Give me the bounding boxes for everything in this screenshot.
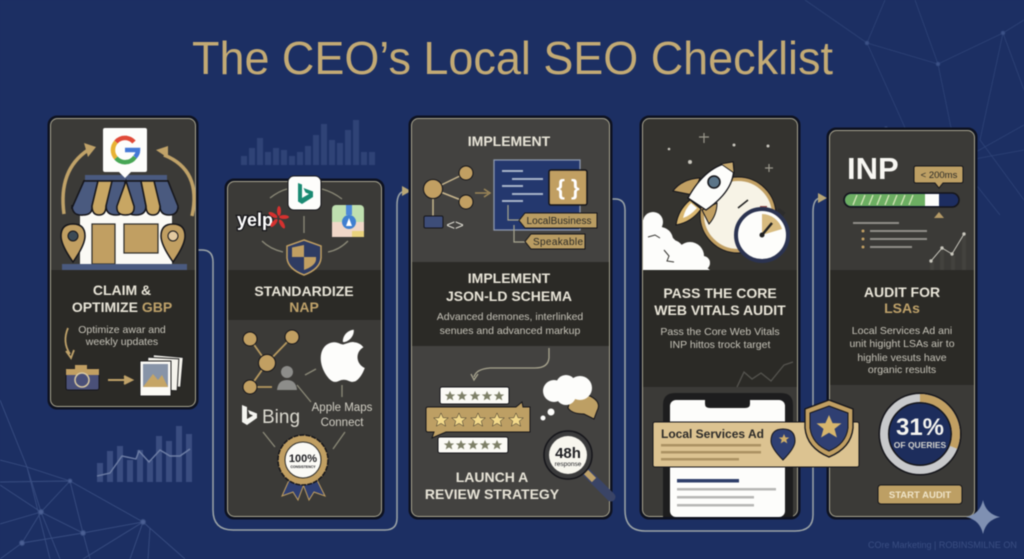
text block: Advanced demones, interlinked <box>437 311 583 323</box>
text block: highlie vesuts have <box>857 352 947 364</box>
icon: code document <box>494 160 587 242</box>
icon: Apple Maps <box>332 205 364 237</box>
panel band <box>412 262 609 346</box>
panel band <box>643 270 797 387</box>
icon: magnifier 48h: 48h <box>555 445 581 462</box>
heading <box>864 284 940 316</box>
icon: Bing logo with label <box>242 405 300 428</box>
icon: shield <box>287 240 321 275</box>
heading: PASS THE CORE <box>663 285 777 301</box>
donut chart: 31% of queries: 31% <box>896 414 944 441</box>
heading: WEB VITALS AUDIT <box>654 302 786 318</box>
heading: IMPLEMENT <box>468 270 551 286</box>
icon: large clock <box>700 177 776 253</box>
text block <box>437 311 583 337</box>
text block: weekly updates <box>85 336 158 348</box>
icon: Bing logo with label: Bing <box>262 407 300 428</box>
donut chart: 31% of queries: OF QUERIES <box>894 440 947 450</box>
heading: LAUNCH A <box>456 469 528 485</box>
text block: Optimize awar and <box>78 324 166 336</box>
decorative network bottom left <box>0 400 185 559</box>
label: Apple Maps Connect: Connect <box>321 417 364 429</box>
icon: Bing tile <box>288 176 321 210</box>
icon: thought cloud <box>540 375 598 420</box>
ad card <box>653 400 859 467</box>
review card bottom <box>438 437 508 453</box>
panel band <box>51 270 195 406</box>
tag: Speakable: Speakable <box>533 237 583 248</box>
heading <box>446 270 572 304</box>
arrow: curved down <box>471 348 549 380</box>
icon: magnifier 48h: response <box>555 461 582 468</box>
connector: panel 1 to panel 2 and 3 <box>197 186 411 530</box>
icon: magnifier 48h <box>544 431 611 497</box>
icon: storefront <box>62 175 187 270</box>
badge: 100% consistency: CONSISTENCY <box>290 465 316 469</box>
decorative bar chart top <box>241 120 375 165</box>
panel: core web vitals <box>641 117 859 518</box>
connector: panel 3 to panel 4 and 5 <box>611 193 827 531</box>
heading <box>654 285 786 318</box>
heading <box>425 469 560 502</box>
label: Apple Maps Connect: Apple Maps <box>312 402 373 414</box>
arrow: camera to photos <box>108 376 132 384</box>
dashed ring <box>262 189 348 252</box>
arrow: right curved <box>156 146 194 216</box>
tag: LocalBusiness: LocalBusiness <box>526 216 592 227</box>
icon: right map pin <box>161 224 185 262</box>
heading: INP: INP <box>847 151 899 186</box>
icon: stopwatch <box>736 200 788 261</box>
panel: standardize NAP <box>226 176 383 518</box>
heading: AUDIT FOR <box>864 284 940 300</box>
icon: rocket <box>673 162 734 225</box>
phone <box>663 393 793 517</box>
panel band <box>228 270 381 320</box>
icon: large shield <box>805 400 853 457</box>
text block <box>660 326 780 351</box>
icon: sparkle <box>966 500 1000 534</box>
heading: OPTIMIZE GBP <box>72 299 172 315</box>
panel: claim and optimize GBP <box>49 117 197 408</box>
lower section <box>643 387 797 516</box>
badge: 100% consistency <box>278 435 328 500</box>
tag: Speakable <box>525 234 585 249</box>
panel: JSON-LD schema and reviews <box>410 117 611 518</box>
text block: INP hittos trock target <box>670 339 770 351</box>
heading: REVIEW STRATEGY <box>425 486 560 502</box>
list lines <box>853 222 927 248</box>
decorative bar chart bottom <box>97 426 192 482</box>
text block: Pass the Core Web Vitals <box>660 326 780 338</box>
heading: LSAs <box>884 300 920 316</box>
progress bar <box>844 193 959 218</box>
icon: small pin <box>771 429 795 460</box>
heading: CLAIM & <box>93 282 151 298</box>
review card featured <box>426 402 530 438</box>
text block: organic results <box>868 364 936 376</box>
footer credit: COre Marketing | ROBINSMILNE ON <box>868 540 1017 550</box>
tag: under 200ms: < 200ms <box>921 170 958 181</box>
icon: Yelp <box>237 206 289 230</box>
tag: under 200ms <box>914 166 963 188</box>
badge: 100% consistency: 100% <box>289 453 317 465</box>
review card top <box>440 387 509 404</box>
icon: camera <box>66 365 99 390</box>
icon: Google pin card <box>103 128 147 178</box>
arrow: left curved <box>63 143 96 214</box>
icon: network <box>243 330 299 394</box>
label: Apple Maps Connect <box>312 402 373 429</box>
icon: code document: { } <box>556 175 580 200</box>
icon: schema network <box>424 166 473 234</box>
mini line chart <box>929 232 966 270</box>
title: The CEO’s Local SEO Checklist <box>192 32 833 84</box>
ad card: Local Services Ad <box>661 427 764 441</box>
text block: Local Services Ad ani <box>852 325 952 337</box>
text block <box>78 324 166 348</box>
faded line chart <box>737 362 793 387</box>
text block: unit higight LSAs air to <box>849 338 955 350</box>
text block: senues and advanced markup <box>440 325 580 337</box>
donut chart: 31% of queries <box>884 398 956 470</box>
button: start audit: START AUDIT <box>889 490 951 501</box>
stars <box>668 133 773 172</box>
icon: person <box>277 366 297 390</box>
icon: Apple logo <box>321 330 365 382</box>
icon: Yelp: yelp <box>237 210 273 230</box>
icon: smoke cloud <box>643 212 710 270</box>
arrow <box>475 189 490 197</box>
heading: NAP <box>289 299 319 315</box>
panel: audit for LSAs <box>828 129 976 518</box>
heading <box>72 282 172 315</box>
connectors <box>263 369 345 449</box>
heading: JSON-LD SCHEMA <box>446 288 572 304</box>
heading: STANDARDIZE <box>254 283 354 299</box>
heading: IMPLEMENT <box>468 133 551 149</box>
icon: photos <box>140 355 183 396</box>
button: start audit <box>878 485 962 504</box>
text block <box>849 325 955 376</box>
icon: schema network: <> <box>446 217 464 234</box>
panel band <box>830 270 974 385</box>
heading <box>254 283 354 315</box>
tag: LocalBusiness <box>519 213 597 228</box>
icon: left map pin <box>61 224 85 262</box>
arrow: down to camera <box>65 328 74 358</box>
decorative network top right <box>805 0 1024 215</box>
